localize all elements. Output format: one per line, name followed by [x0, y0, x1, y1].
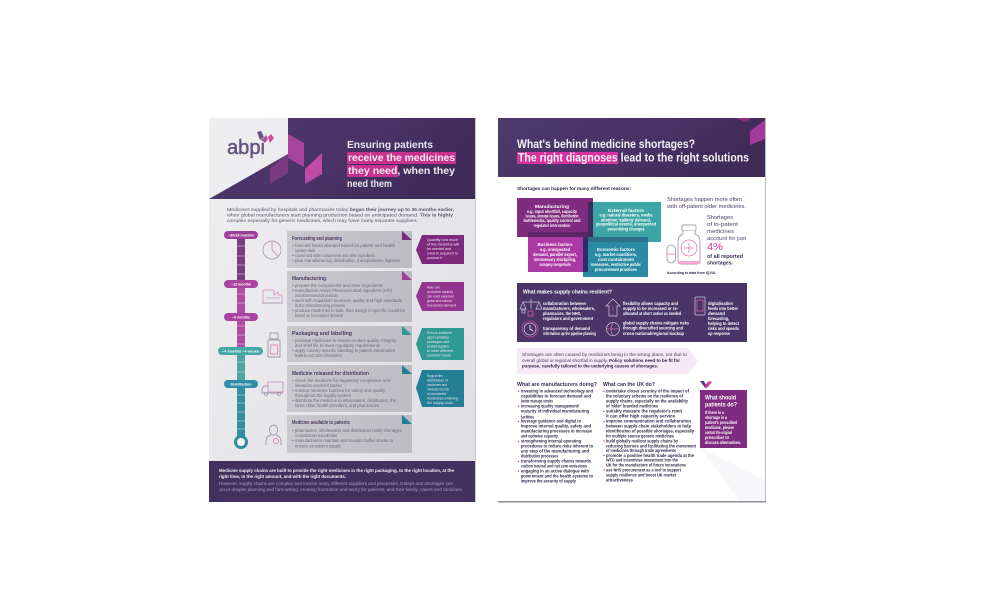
column: what are manufacturers doing: What are manufacturers doing? — [517, 382, 598, 388]
callout: support distribution: of counterfeit — [427, 392, 446, 396]
callout: quantify: produce it — [427, 256, 442, 260]
panel: right leaflet — [498, 118, 766, 502]
column: what can the UK do: for multiple source generic medicines — [606, 433, 674, 438]
panel: forecasting and planning: Forecasting and planning — [292, 236, 342, 242]
stat caption — [707, 254, 743, 266]
text: collaboration: regulators and government — [543, 316, 594, 321]
column: what are manufacturers doing: any step of the manufacturing and — [521, 449, 589, 454]
callout: off-patent text: with off-patent older medicines. — [666, 204, 746, 210]
column: what can the UK do: of 'older' branded medicines — [606, 404, 658, 409]
callout: off-patent text: Shortages happen more often — [667, 197, 742, 203]
box: external factors: attention 'spiking' demand, — [601, 218, 651, 222]
panel: what should patients do: discuss alternatives. — [705, 440, 741, 445]
pill: 14 months / 14 weeks: ~4 months ~4 weeks — [222, 348, 259, 353]
intro text: complex especially for generic medicines, which may have many separate suppliers. — [227, 218, 418, 223]
source note: According to data from IQVIA. — [667, 271, 716, 275]
callout: make sure: forecasted demand — [427, 304, 456, 308]
callout: quantify: what is required to — [427, 252, 458, 256]
pill: 36/18 months: ~36/18 months — [228, 232, 254, 237]
icon: heart mark — [700, 381, 712, 389]
panel: packaging and labelling: leaflets and other information — [295, 353, 343, 358]
box: external factors: e.g. natural disasters, media — [600, 212, 653, 218]
panel: what should patients do: What should — [705, 396, 736, 402]
callout: quantify — [416, 235, 464, 264]
column: what can the UK do: reducing barriers and facilitating the movement — [606, 443, 696, 448]
column: what are manufacturers doing: improve internal quality, safety and — [521, 424, 591, 429]
callout: off-patent text: Shortages — [707, 215, 733, 221]
title: receive the medicines — [348, 152, 455, 164]
text: collaboration: collaboration between — [543, 301, 586, 306]
callout: ensure sufficient: to meet different — [427, 349, 453, 353]
callout: pink arrow: purpose, carefully tailored to the underlying causes of shortages. — [522, 364, 658, 370]
panel: what makes supply chains resilient — [517, 283, 747, 342]
column: what can the UK do: attractiveness — [606, 478, 633, 483]
icon: globe — [606, 322, 620, 336]
title — [517, 139, 749, 164]
box: economic factors: e.g. market conditions, — [595, 252, 637, 257]
title: What's behind medicine shortages? — [517, 139, 695, 151]
panel: forecasting and planning — [287, 231, 412, 268]
text: flexibility and global: flexibility allows capacity and — [623, 301, 678, 306]
footer banner: However, supply chains are complex and involve many different suppliers and processes. Delays and shortages can — [219, 481, 453, 487]
box: business factors: e.g. unexpected — [540, 247, 570, 252]
panel: what should patients do: patients do? — [705, 402, 737, 408]
callout: support distribution: the supply chain — [427, 401, 453, 405]
title: The right diagnoses lead to the right solutions — [518, 152, 749, 164]
box: business factors: demand, parallel export, — [533, 252, 577, 257]
column: what are manufacturers doing: maturity of individual manufacturing — [521, 408, 589, 413]
panel: left leaflet — [209, 118, 476, 502]
column: what can the UK do: WTO and incentivise investment into the — [606, 458, 678, 463]
box: external factors: prescribing changes — [608, 226, 645, 232]
column: what are manufacturers doing: manufacturing processes to increase — [521, 429, 592, 434]
box: economic factors: measures, restrictive public — [591, 262, 642, 267]
panel: medicine released for distribution: Medicine released for distribution — [292, 371, 369, 377]
panel: forecasting and planning: forecast future demand based on patient and health — [295, 243, 396, 248]
pill: 12 months: ~12 months — [231, 281, 251, 286]
callout: support distribution — [416, 370, 464, 407]
end marker — [236, 436, 246, 448]
text: collaboration: manufacturers, wholesalers, — [543, 306, 595, 311]
icon: scales — [520, 299, 542, 316]
box: business factors — [528, 232, 588, 272]
panel: medicine released for distribution: released to monitored batches — [295, 383, 342, 388]
panel: forecasting and planning: plan manufacturing, distribution, transportation logistics — [295, 258, 400, 263]
box: business factors: unnecessary stockpiling, — [534, 257, 576, 262]
icon: packaging box and bottle — [268, 333, 280, 357]
column: what can the UK do: build globally resilient supply chains by — [606, 438, 678, 443]
title: they need, when they — [348, 165, 455, 177]
panel: medicine available to patients: to manufacturers and authorities — [295, 433, 337, 438]
pill: 36/18 months — [224, 231, 258, 239]
text: flexibility and global: global supply chains mitigate risks — [623, 320, 690, 326]
stat caption: of all reported — [707, 254, 743, 260]
box: economic factors — [583, 237, 648, 277]
stat: 4%: 4% — [707, 241, 723, 253]
callout: support distribution: medicines entering — [427, 396, 458, 400]
column: what can the UK do: undertake closer scrutiny of the impact of — [606, 389, 689, 394]
text: digitalisation: digitalisation — [708, 301, 733, 306]
column: what are manufacturers doing: government and the health systems to — [521, 473, 593, 478]
footer banner: Medicine supply chains are built to provide the right medicines in the right packaging, to the right location, at the — [219, 468, 454, 474]
panel: what should patients do: medicine, please — [705, 425, 735, 430]
panel: medicine available to patients: ensure consistent supply — [295, 444, 342, 448]
panel: manufacturing: and pharmaceutical products — [295, 293, 338, 298]
title: need them — [347, 178, 392, 190]
footer banner: occur despite planning and forecasting, creating frustration and worry for patients, and their family, carers and clinicians. — [219, 487, 463, 493]
column: what are manufacturers doing: and optimise capacity — [521, 434, 558, 439]
text: digitalisation — [708, 301, 740, 336]
panel: medicine released for distribution: NHS, other health providers, and pharmacies — [295, 403, 379, 408]
box: manufacturing — [517, 198, 593, 237]
text: flexibility and global: through diversified sourcing and — [623, 326, 683, 330]
title: Ensuring patients — [347, 139, 433, 151]
panel: what should patients do: prescriber to — [705, 435, 729, 440]
header banner — [498, 118, 765, 177]
callout: off-patent text: of in-patent — [707, 222, 739, 228]
title — [347, 139, 456, 190]
pill: 6 months: ~6 months — [232, 314, 250, 319]
box overlaps — [528, 202, 648, 272]
header banner — [209, 118, 475, 199]
box: business factors: Business factors — [538, 242, 573, 248]
panel: medicine released for distribution: monitor medicine batches for safety and quality — [295, 388, 386, 393]
callout: off-patent text: medicines — [707, 229, 734, 235]
column: what are manufacturers doing: procedures to reduce risks inherent to — [521, 444, 593, 449]
callout: ensure sufficient — [416, 328, 464, 360]
stat caption: shortages. — [707, 260, 734, 266]
callout: pink arrow: Shortages are often caused by medicines being in the wrong place, not due to — [522, 352, 687, 358]
icon: pie chart — [263, 241, 281, 259]
panel: manufacturing: manufacture Active Pharmaceutical Ingredient (API) — [295, 288, 393, 293]
text: collaboration: pharmacies, the NHS, — [543, 311, 581, 316]
column: what are manufacturers doing: engaging in an active dialogue with — [521, 468, 589, 473]
box: manufacturing: regulator intervention — [534, 223, 571, 228]
column: what can the UK do — [603, 382, 696, 483]
text: digitalisation: up response — [708, 331, 731, 336]
callout: make sure: production capacity — [427, 290, 453, 294]
text: digitalisation: helping to detect — [708, 321, 739, 326]
column: what are manufacturers doing: better manage stocks — [521, 399, 553, 404]
panel: packaging and labelling: package medicines to ensure product quality, integrity, — [295, 338, 397, 343]
panel: forecasting and planning: system data — [295, 248, 316, 253]
panel: medicine released for distribution: distribute the medicine to wholesalers, distributors, the — [295, 398, 397, 403]
text: digitalisation: risks and speeds — [708, 326, 740, 331]
callout: off-patent text — [666, 197, 746, 242]
subheading: Shortages can happen for many different reasons: — [517, 186, 631, 192]
panel: manufacturing: in the manufacturing process — [295, 303, 345, 308]
callout: make sure: can meet expected — [427, 294, 454, 298]
icon: arrow house — [606, 299, 620, 316]
icon: truck — [262, 382, 283, 396]
box: business factors: company merger/sale — [540, 262, 571, 267]
callout: ensure sufficient: packaged and — [427, 340, 449, 344]
panel: medicine released for distribution — [287, 365, 412, 412]
text: flexibility and global: supply to be increased or re- — [623, 306, 679, 311]
panel: medicine available to patients: pharmacies, wholesalers and distributors notify shortages — [295, 428, 402, 433]
column: what are manufacturers doing: facilities — [521, 414, 534, 419]
panel: manufacturing: work with regulators to ensure quality and high standards — [295, 298, 402, 303]
callout: ensure sufficient: labelled supplies — [427, 344, 449, 348]
panel: packaging and labelling — [287, 326, 412, 362]
panel: what should patients do — [700, 390, 747, 448]
icon: person — [266, 425, 281, 445]
pill: distribution — [224, 380, 258, 388]
logo: abpi — [227, 131, 274, 159]
panel: medicine available to patients: Medicine available to patients — [292, 420, 350, 426]
callout: support distribution: medicines and — [427, 383, 447, 387]
icon: factory — [262, 290, 283, 303]
panel: medicine released for distribution: throughout the supply system — [295, 393, 351, 398]
callout: quantify: Quantify how much — [427, 238, 458, 242]
callout: support distribution: Support the — [427, 374, 443, 378]
box: manufacturing: issues, storage issues, distribution — [526, 214, 579, 218]
panel: manufacturing — [287, 271, 412, 322]
pill: distribution: Distribution — [230, 381, 252, 386]
intro text — [227, 207, 454, 223]
box: manufacturing: Manufacturing — [535, 204, 569, 210]
text: flexibility and global: allocated at short notice as needed — [623, 311, 681, 316]
icon: bottle and pill — [667, 225, 700, 264]
footer banner: right time, in the right amount, and with the right documents. — [219, 474, 346, 480]
box: economic factors: cost containment — [598, 257, 635, 262]
panel: packaging and labelling: and shelf life to meet regulatory requirements — [295, 343, 380, 348]
column: what can the UK do: promote a positive health trade agenda at the — [606, 453, 694, 458]
pill: 6 months — [224, 313, 258, 321]
callout: pink arrow: overall global or regional shortfall in supply. Policy solutions need to be fit for — [522, 358, 680, 364]
panel: what makes supply chains resilient: What makes supply chains resilient? — [523, 290, 612, 296]
panel: manufacturing: Manufacturing — [292, 276, 326, 282]
panel: what should patients do: shortage in a — [705, 415, 728, 420]
column: what are manufacturers doing: improve the security of supply — [521, 478, 576, 483]
icon: clock — [522, 321, 538, 337]
box: external factors: geopolitical events, unexpected — [596, 222, 656, 226]
column: what are manufacturers doing — [517, 382, 598, 483]
text: collaboration: information up the pipeline planning — [543, 331, 596, 336]
panel: packaging and labelling: apply country specific labelling to patient information — [295, 348, 396, 353]
column: what can the UK do: the voluntary scheme on the resilience of — [606, 394, 683, 399]
box: external factors: External factors — [608, 208, 644, 214]
column: what can the UK do: identification of possible shortages, especially — [606, 428, 694, 433]
callout: support distribution: minimise the risk — [427, 388, 449, 392]
box: economic factors: Economic factors — [597, 247, 635, 253]
text: flexibility and global: cross-national/regional backup — [623, 331, 684, 336]
column: what are manufacturers doing: transforming supply chains towards — [521, 459, 591, 464]
panel: manufacturing: prepare the components and other ingredients — [295, 283, 383, 288]
panel: forecasting and planning: source and order components and other ingredients — [295, 253, 375, 258]
callout: make sure: global and national — [427, 299, 452, 303]
timeline — [218, 231, 263, 448]
pill: 12 months — [224, 280, 258, 288]
intro text: when global manufacturers start planning production based on anticipated demand. This is highly — [227, 212, 453, 218]
callout: quantify: be needed and — [427, 247, 451, 251]
text: collaboration — [543, 301, 596, 336]
column: what are manufacturers doing: strengthening internal operating — [521, 439, 581, 444]
text: collaboration: transparency of demand — [543, 326, 590, 331]
column: what can the UK do: use NHS procurement as a tool to support — [606, 468, 681, 473]
column: what are manufacturers doing: leverage guidance and digital to — [521, 419, 581, 424]
callout: ensure sufficient: Ensure sufficient — [427, 331, 452, 335]
column: what are manufacturers doing: increasing quality management/ — [521, 404, 580, 409]
column: what can the UK do: between supply chain stakeholders to help — [606, 423, 691, 428]
callout: ensure sufficient: countries' needs — [427, 354, 451, 358]
column: what can the UK do: supply resilience and boost UK market — [606, 472, 676, 477]
column: what can the UK do: What can the UK do? — [603, 382, 656, 388]
panel: what should patients do: If there is a — [705, 410, 725, 415]
footer banner — [209, 461, 475, 502]
column: what can the UK do: UK for the manufacture of future innovations — [606, 463, 686, 468]
box: manufacturing: bottlenecks, quality control and — [524, 218, 581, 223]
panel: manufacturing: based on forecasted demand — [295, 313, 344, 318]
panel: what should patients do: patient's prescribed — [705, 420, 737, 425]
icon: tablet — [695, 297, 705, 315]
column: what are manufacturers doing: investing in advanced technology and — [521, 389, 593, 394]
intro text: Medicines supplied by hospitals and pharmacies today began their journey up to 36 months earlier, — [227, 207, 454, 212]
column: what are manufacturers doing: distribution processes — [521, 454, 558, 459]
panel: packaging and labelling: Packaging and labelling — [292, 331, 352, 337]
callout: quantify: of the medicine will — [427, 242, 459, 246]
text: digitalisation: feeds into better — [708, 306, 738, 311]
text: flexibility and global — [623, 301, 690, 336]
text: digitalisation: forecasting, — [708, 316, 729, 321]
text: digitalisation: demand — [708, 311, 725, 316]
column: what are manufacturers doing: carbon neutral and net zero emissions — [521, 464, 587, 469]
pill: 14 months / 14 weeks — [218, 347, 263, 355]
panel: medicine available to patients: manufacturers maintain and monitor buffer stocks to — [295, 438, 394, 443]
panel: medicine released for distribution: check the medicine for regulatory compliance and — [295, 378, 391, 383]
panel: medicine available to patients — [287, 415, 412, 453]
callout: make sure — [416, 282, 464, 311]
callout: support distribution: distribution of — [427, 378, 448, 382]
panel: manufacturing: produce medicines in bulk, then assign to specific countries — [295, 308, 405, 313]
column: what can the UK do: of medicines through trade agreements — [606, 448, 676, 453]
column: what can the UK do: it can offer high capacity service — [606, 413, 675, 418]
box: economic factors: procurement practices — [595, 267, 638, 272]
callout: off-patent text: account for just — [707, 236, 746, 242]
panel: what should patients do: contact the original — [705, 430, 732, 435]
column: what can the UK do: improve communication and collaboration — [606, 419, 691, 424]
column: what are manufacturers doing: capabilities to forecast demand and — [521, 394, 591, 399]
box: external factors — [588, 202, 661, 242]
logo: abpi: abpi — [227, 137, 265, 159]
callout: pink arrow — [517, 348, 698, 374]
box: manufacturing: e.g. input shortfall, capacity — [527, 209, 578, 214]
callout: make sure: Make sure — [427, 286, 440, 290]
callout: ensure sufficient: appropriately — [427, 336, 449, 340]
column: what can the UK do: suitably measure the regulator's remit — [606, 409, 682, 414]
column: what can the UK do: supply chains, especially on the availability — [606, 398, 688, 403]
